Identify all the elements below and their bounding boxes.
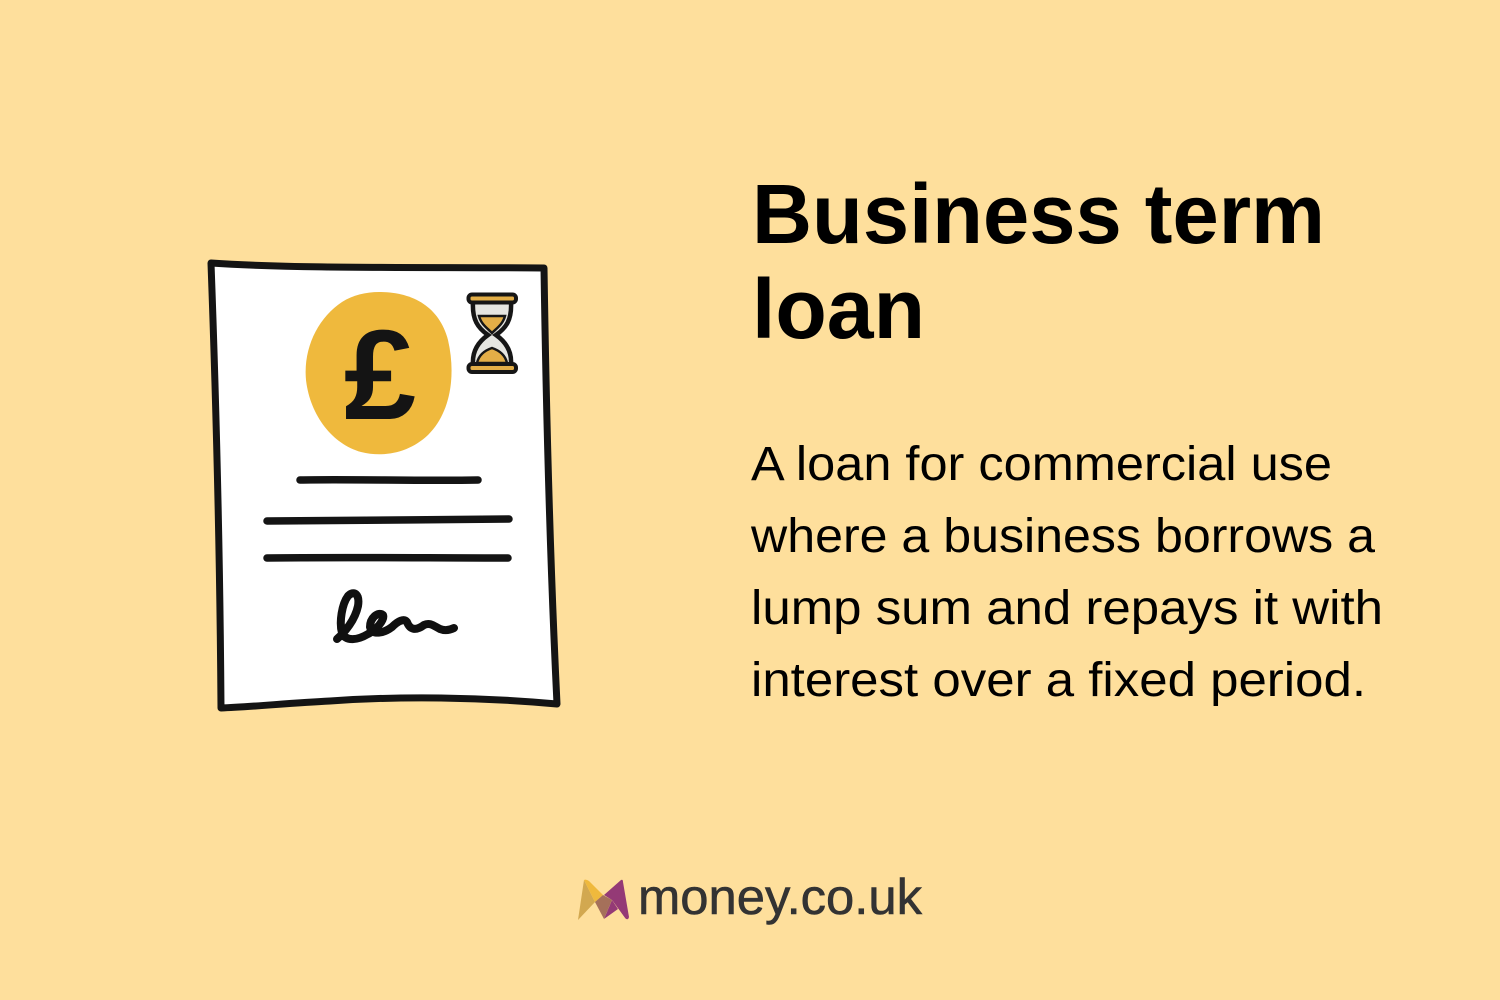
description text: A loan for commercial use (751, 438, 1332, 491)
icon: hourglass (468, 294, 516, 372)
logo mark (578, 880, 629, 920)
text lines (267, 480, 509, 558)
title: Business term (752, 167, 1325, 261)
illustration: loan document (211, 263, 557, 708)
description text: lump sum and repays it with (751, 582, 1383, 635)
description text: where a business borrows a (750, 510, 1375, 563)
signature (337, 593, 454, 639)
description text: interest over a fixed period. (751, 654, 1366, 707)
pound sign: £ (344, 304, 416, 447)
document sheet (211, 263, 557, 708)
logo: money.co.uk (578, 869, 923, 925)
logo wordmark: money.co.uk (638, 869, 923, 925)
title: loan (752, 262, 925, 356)
icon: pound coin (306, 292, 452, 454)
